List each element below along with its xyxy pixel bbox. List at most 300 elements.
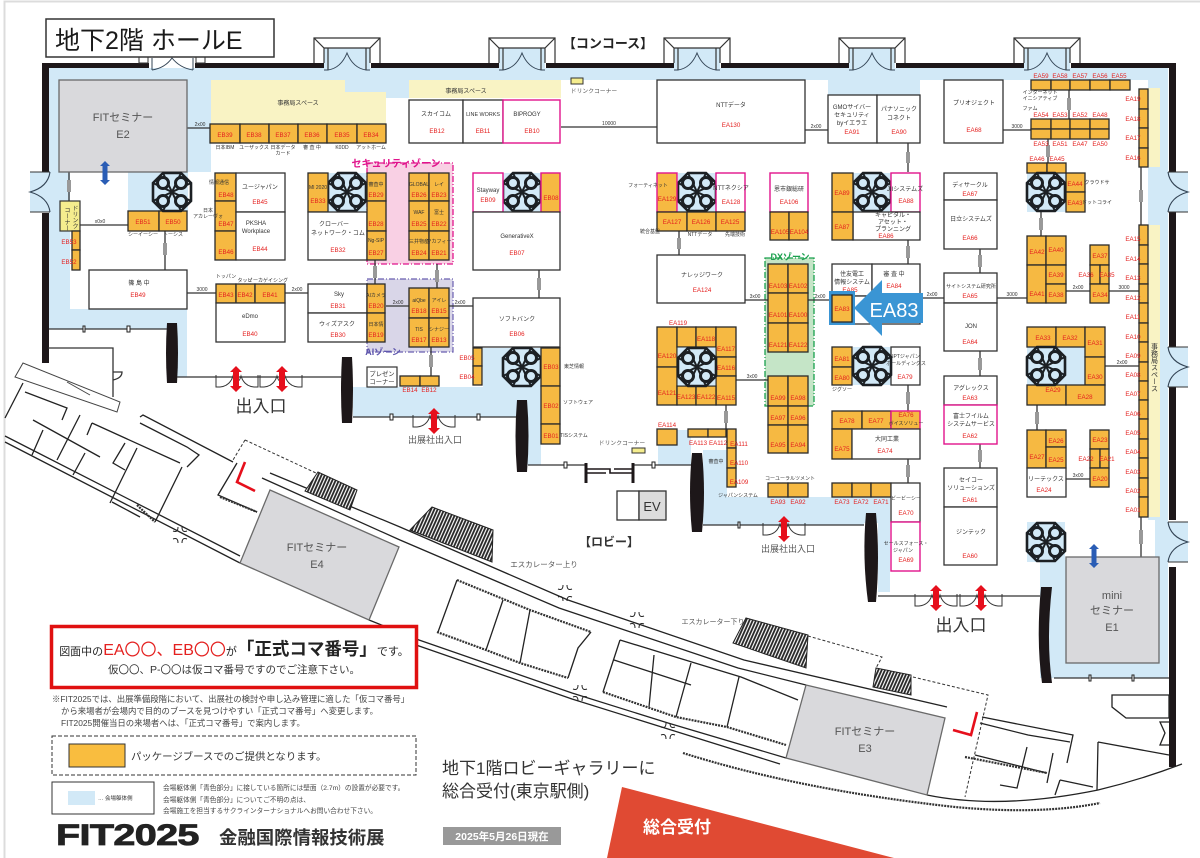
booth: EA106: EA104: [790, 229, 809, 236]
presentation corner: プレゼン: [369, 369, 395, 378]
booths: middle column EA68-EA60: ディサークル: [952, 181, 988, 189]
booths: EA37-EA34: EA34: [1092, 292, 1108, 299]
gap dimension labels: [95, 121, 1130, 479]
booths: EA46-EA43: EA44: [1067, 181, 1083, 188]
booths: EB09-EB06: [473, 173, 560, 347]
DX zone booths: EA101: [769, 312, 788, 319]
booths: EA114-EA109: EA110: [730, 460, 749, 467]
booths: top row EB39-EB34: EB38: [246, 132, 262, 139]
booth EB49: EB49: [130, 292, 146, 299]
drink corner lobby: [599, 440, 645, 453]
booths: EA114-EA109: EA112: [709, 440, 728, 447]
booths: EA89-EA84: 情報システム: [834, 278, 870, 286]
booths: right column lower: [1125, 225, 1158, 517]
booths: EB53-EB50: EB53: [61, 239, 77, 246]
reception note: 地下1階ロビーギャラリーに: [442, 759, 655, 778]
seminar room E2: [59, 80, 187, 172]
exhibitor entrance right: 出展社出入口: [761, 543, 815, 554]
booths: EA46-EA43: EA45: [1049, 156, 1065, 163]
booths: EA23-EA20: EA23: [1092, 437, 1108, 444]
booths: EA89-EA84: EA87: [834, 224, 850, 231]
booths: middle column EA68-EA60: EA68: [966, 127, 982, 134]
gap dimension labels: 3000: [1011, 124, 1023, 130]
drink corner left: ドリンク: [71, 205, 78, 229]
gap dimension labels: 2x00: [292, 287, 303, 293]
booths: EA89-EA84: 審 査 中: [883, 270, 905, 278]
drink corner left: コーナー: [63, 207, 70, 231]
gap dimension labels: 2x00: [1073, 285, 1084, 291]
gap dimension labels: 2x00: [811, 124, 822, 130]
booths: EA73-EA69: EA72: [853, 499, 869, 506]
booths: EA78-EA74: EA77: [868, 418, 884, 425]
booths: EA78-EA74: EA76: [898, 412, 914, 419]
booths: EA27-EA24: リーテックス: [1028, 476, 1064, 483]
booths: EB09-EB06: EB08: [543, 195, 559, 202]
booths: EB33-EB27: 審査中: [368, 181, 384, 188]
seminar room E2: E2: [116, 129, 130, 141]
booth EB49: 篠 島 中: [128, 279, 150, 287]
escalators: エスカレーター下り: [682, 617, 744, 626]
seminar room E1: セミナー: [1090, 604, 1134, 617]
booths: EA59-EA47 block: EA50: [1092, 141, 1108, 148]
booths: EB48-EB44: EB47: [218, 221, 234, 228]
booths: EA123-EA115 cluster: EA116: [717, 365, 736, 372]
reception triangle: 総合受付: [643, 818, 711, 837]
booths: EA59-EA47 block: EA48: [1092, 112, 1108, 119]
booths: middle column EA68-EA60: EA60: [962, 553, 978, 560]
booth: EA106: EA106: [780, 199, 799, 206]
booths: Sky and wizask: EB30: [330, 332, 346, 339]
icon: pillar cluster EB: [328, 173, 366, 211]
booths: middle column EA68-EA60: プリオジェクト: [953, 100, 995, 107]
drink corner left: [60, 201, 80, 231]
booths: middle column EA68-EA60: セイコー: [959, 477, 983, 484]
zone: security: [352, 158, 453, 264]
booths: right column lower: EA01: [1125, 507, 1141, 514]
booths: right column upper: EA17: [1125, 135, 1141, 142]
booths: security zone: WAF: [414, 210, 424, 216]
booths: EA91 EA90: EA90: [891, 129, 907, 136]
booths: EB48-EB44: アカレーヴォ: [193, 213, 223, 220]
booths: EA42-EA38: [1027, 236, 1066, 303]
booths: middle column EA68-EA60: 富士フイルム: [953, 412, 989, 420]
top booths: EB12 EB11 EB10: EB12: [429, 128, 445, 135]
booths: right column lower: EA14: [1125, 256, 1141, 263]
booths: right column lower: EA12: [1125, 295, 1141, 302]
booths: EA81-EA79: EA80: [834, 375, 850, 382]
booths: EA73-EA69: EA73: [834, 499, 850, 506]
booths: EA27-EA24: EA24: [1036, 487, 1052, 494]
booths: AI zone: アイレ: [432, 298, 446, 304]
entrance right: [915, 585, 1002, 635]
callout arrow EA83: [854, 280, 923, 336]
lobby door structure: [586, 463, 633, 483]
booths: EA46-EA43: [1027, 156, 1112, 212]
booths: EA81-EA79: ホールディングス: [886, 360, 926, 367]
booths: EA129-EA124: EA127: [663, 219, 682, 226]
top booths: EB12 EB11 EB10: LINE WORKS: [466, 112, 500, 118]
booths: EA123-EA115 cluster: EA118: [697, 336, 716, 343]
booths: EA27-EA24: EA26: [1048, 438, 1064, 445]
notice box: 仮〇〇、P-〇〇は仮コマ番号ですのでご注意下さい。: [108, 663, 360, 676]
booth EA130: EA130: [722, 122, 741, 129]
gap dimension labels: 3x00: [1073, 473, 1084, 479]
large pillars: [166, 323, 1052, 683]
booths: EA89-EA84: 住友電工: [840, 270, 864, 278]
gap dimension labels: 2x00: [927, 292, 938, 298]
booths: right column lower: EA11: [1126, 314, 1141, 321]
reception note: 総合受付(東京駅側): [442, 782, 589, 801]
booths: EA129-EA124: [628, 173, 749, 303]
booths: EB43-EB40: EB43: [218, 292, 234, 299]
booths: AI zone: シナジー: [429, 327, 449, 333]
booths: EA123-EA115 cluster: [657, 320, 736, 405]
reception triangle: [607, 787, 894, 858]
booths: top row EB39-EB34: 日本IBM: [216, 144, 234, 151]
gap dimension labels: 3000: [1118, 285, 1130, 291]
booths: right column upper: EA18: [1125, 116, 1141, 123]
booths: security zone: EB23: [431, 192, 447, 199]
top booths: EB12 EB11 EB10: EB11: [476, 128, 491, 135]
top booths: EB12 EB11 EB10: EB10: [524, 128, 540, 135]
icon: pillar cluster EA29: [1027, 347, 1065, 385]
booths: EA23-EA20: [1078, 430, 1115, 487]
entrance left: [216, 366, 302, 416]
icon: pillar lower right: [1027, 523, 1065, 561]
booths: EB33-EB27: EB32: [330, 247, 346, 254]
gap dimension labels: 3000: [196, 287, 208, 293]
zone: DX: [765, 252, 814, 406]
booths: right column lower: EA07: [1125, 391, 1141, 398]
DX zone booths: [768, 264, 808, 406]
red direction marks: [237, 462, 977, 735]
booths: EA91 EA90: byイエラエ: [837, 120, 867, 127]
booths: EB33-EB27: ネットワーク・コム: [311, 230, 365, 237]
booths: EB48-EB44: [193, 173, 285, 260]
booths: EA37-EA34: EA35: [1099, 272, 1115, 279]
booths: security zone: EB26: [411, 192, 427, 199]
booths: EA59-EA47 block: EA58: [1052, 73, 1068, 80]
top doors: [139, 38, 1080, 70]
booths: right column lower: EA10: [1125, 334, 1141, 341]
booths: EA129-EA124: EA124: [693, 287, 712, 294]
icon: pillar cluster EB09: [503, 173, 541, 211]
icon: pillar cluster EA43: [1027, 173, 1065, 211]
booths: EA78-EA74: 大同工業: [875, 435, 899, 443]
booths: EA89-EA84: JIIシステムズ: [887, 185, 923, 193]
presentation corner: コーナー: [369, 378, 395, 386]
booths: AI zone: [366, 284, 449, 347]
booths: middle column EA68-EA60: 日立システムズ: [950, 215, 992, 223]
legend note: [163, 783, 404, 815]
booths: EA114-EA109: EA109: [730, 479, 749, 486]
booths: EA114-EA109: [657, 422, 758, 499]
top booths: EB12 EB11 EB10: 事務局スペース: [445, 87, 487, 95]
booths: top row EB39-EB34: アットホーム: [356, 145, 386, 151]
booths: security zone: 三井物産: [409, 238, 429, 245]
booths: EB09-EB06: Stayway: [477, 188, 499, 194]
booths: middle column EA68-EA60: [944, 80, 1003, 565]
gap dimension labels: 2x00: [815, 294, 826, 300]
booths: security zone: EB25: [411, 221, 427, 228]
booths: EB09-EB06: GenerativeX: [500, 234, 534, 240]
booths: EB33-EB27: クローバー: [319, 221, 349, 228]
booths: Sky and wizask: [308, 284, 367, 342]
booths: EB33-EB27: [308, 173, 386, 260]
booths: AI zone: EB19: [368, 332, 384, 339]
booths: EA78-EA74: EA75: [834, 446, 850, 453]
exhibitor entrance left: 出展社出入口: [408, 434, 462, 445]
booth: EA106: 恩市銀総研: [774, 185, 804, 193]
booths: security zone: EB21: [431, 250, 447, 257]
booths: EB53-EB50: EB52: [61, 259, 77, 266]
booths: EA73-EA69: ジャパン: [893, 548, 913, 554]
lobby label: 【ロビー】: [579, 534, 639, 549]
booths: EA46-EA43: ドットコライ: [1082, 200, 1112, 206]
logo subtitle: 金融国際情報技術展: [219, 827, 385, 848]
gap dimension labels: 3x00: [750, 294, 761, 300]
escalators: エスカレーター上り: [510, 560, 578, 569]
DX zone booths: EA98: [790, 395, 806, 402]
seminar room E4: E4: [310, 559, 324, 571]
booths: EA91 EA90: EA91: [844, 129, 860, 136]
booths: EA59-EA47 block: EA53: [1033, 141, 1049, 148]
elevator: [617, 491, 666, 520]
booths: security zone: マカフィー: [427, 239, 451, 245]
booths: EA78-EA74: [832, 411, 923, 459]
presentation corner: [367, 367, 397, 387]
booths: AI zone: AIカメラ: [366, 293, 386, 299]
booths: EA129-EA124: EA125: [721, 219, 740, 226]
booths: EB48-EB44: PKSHA: [246, 221, 266, 227]
highlighted booth EA83: EA83: [834, 306, 850, 313]
booths: middle column EA68-EA60: ソリューションズ: [947, 484, 995, 492]
booths: middle column EA68-EA60: EA67: [962, 191, 978, 198]
booths: EB43-EB40: タッピ: [237, 277, 253, 284]
booths: EB43-EB40: EB40: [242, 331, 258, 338]
booths: below DX zone: [765, 406, 815, 506]
booths: EA73-EA69: ビービーシー: [891, 495, 921, 502]
note text: から来場者が会場内で目的のブースを見つけやすい「正式コマ番号」へ変更します。: [61, 706, 378, 716]
booths: right column lower: 事務局スペース: [1150, 342, 1158, 392]
booths: middle column EA68-EA60: EA62: [962, 433, 978, 440]
entrance left: 出入口: [236, 397, 286, 416]
booths: EA46-EA43: EA43: [1067, 200, 1083, 207]
booths: EA33-EA28: [1027, 327, 1105, 405]
booths: EA59-EA47 block: イニシアティブ: [1023, 95, 1057, 102]
booths: top row EB39-EB34: ユーザックス: [239, 145, 269, 151]
date stamp: 2025年5月26日現在: [455, 830, 549, 843]
booths: AI zone: EB20: [368, 303, 384, 310]
booths: middle column EA68-EA60: EA61: [962, 497, 978, 504]
booths: middle column EA68-EA60: JON: [965, 324, 977, 330]
booths: EA33-EA28: EA33: [1035, 335, 1051, 342]
booths: EA123-EA115 cluster: EA120: [658, 353, 677, 360]
booths: EA73-EA69: [832, 483, 928, 571]
booths: EA91 EA90: コネクト: [887, 115, 911, 122]
booths: EB48-EB44: Workplace: [242, 229, 271, 235]
booths: EA129-EA124: EA126: [692, 219, 711, 226]
booths: EB48-EB44: EB45: [252, 199, 268, 206]
booths: below DX zone: EA94: [790, 442, 806, 449]
booths: EA42-EA38: EA42: [1029, 249, 1045, 256]
booths: EA114-EA109: 審査中: [708, 458, 724, 465]
booths: top row EB39-EB34: EB37: [275, 132, 291, 139]
legend: package booth: [52, 736, 416, 775]
highlighted booth EA83: [829, 291, 855, 325]
top booths: EB12 EB11 EB10: BIPROGY: [513, 112, 541, 118]
booths: EA123-EA115 cluster: EA117: [717, 346, 736, 353]
booths: EA91 EA90: セキュリティ: [834, 112, 870, 119]
booths: EA59-EA47 block: EA59: [1033, 73, 1049, 80]
booths: EA59-EA47 block: EA55: [1111, 73, 1127, 80]
booth: EA106: [770, 173, 809, 240]
booths: EB53-EB50: トーシス: [163, 232, 183, 238]
booths: top row EB39-EB34: EB35: [334, 132, 350, 139]
note text: [52, 694, 409, 728]
booths: right column upper: EA19: [1125, 96, 1141, 103]
booths: EB43-EB40: トッパン: [216, 274, 236, 280]
booths: EB33-EB27: Ng-SIP: [368, 238, 385, 244]
DX zone booths: EA121: [769, 342, 788, 349]
booths: EB53-EB50: EB51: [135, 219, 151, 226]
booths: right column upper: EA16: [1125, 155, 1141, 162]
booths: EA33-EA28: EA31: [1087, 340, 1103, 347]
booths: EA23-EA20: EA22: [1078, 456, 1094, 463]
booths: EB33-EB27: EB29: [368, 192, 384, 199]
booths: top row EB39-EB34: 事務局スペース: [277, 99, 319, 107]
seminar room E1: [1066, 557, 1159, 663]
booths: EA59-EA47 block: [1022, 73, 1130, 148]
DX zone booths: EA103: [769, 283, 788, 290]
booths: EA33-EA28: EA29: [1045, 387, 1061, 394]
booths: EA89-EA84: EA89: [834, 190, 850, 197]
booths: EA129-EA124: EA128: [722, 199, 741, 206]
booths: EB43-EB40: EB42: [237, 292, 253, 299]
DX zone booths: EA102: [789, 283, 808, 290]
booths: EA129-EA124: ナレッジワーク: [681, 272, 723, 279]
booths: EB05-EB01: EB01: [543, 433, 559, 440]
seminar room E2: FITセミナー: [93, 111, 153, 124]
exhibitor entrance right: [761, 516, 815, 554]
booths: EA59-EA47 block: EA52: [1072, 112, 1088, 119]
booths: EB53-EB50: [61, 211, 187, 270]
booths: AI zone: TIS: [415, 327, 424, 333]
booths: EB05-EB01: ソフトウェア: [563, 399, 593, 406]
booths: EB05-EB01: [459, 348, 593, 444]
icon: pillar cluster EA88: [853, 173, 891, 211]
yellow office spaces: [211, 80, 1160, 517]
legend note: 会場躯体側「青色部分」についてご不明の点は、: [163, 795, 310, 804]
booths: Sky and wizask: EB31: [330, 303, 346, 310]
booths: EA89-EA84: EA86: [878, 233, 894, 240]
booths: EA89-EA84: EA84: [886, 283, 902, 290]
booths: middle column EA68-EA60: EA65: [962, 293, 978, 300]
booths: EB14 EB12: EB14: [402, 387, 418, 394]
seminar room E4: FITセミナー: [287, 541, 347, 554]
drink corner lobby: ドリンクコーナー: [599, 440, 645, 447]
booths: right column lower: EA02: [1125, 488, 1141, 495]
escalators: [233, 440, 988, 797]
booths: EA114-EA109: EA113: [689, 440, 708, 447]
booth EB49: [89, 270, 187, 309]
booths: EA37-EA34: EA37: [1092, 253, 1108, 260]
booths: top row EB39-EB34: 審 査 中: [303, 144, 321, 151]
booths: below DX zone: EA97: [770, 415, 786, 422]
booths: EB48-EB44: ユージャパン: [242, 184, 278, 191]
booths: EB09-EB06: EB06: [509, 331, 525, 338]
booths: EA91 EA90: [828, 95, 920, 143]
booths: EA59-EA47 block: EA51: [1052, 141, 1068, 148]
booths: EB43-EB40: eDmo: [242, 314, 259, 320]
booths: AI zone: 日本情: [368, 321, 384, 328]
booths: below DX zone: EA92: [790, 499, 806, 506]
booths: EA89-EA84: プランニング: [875, 225, 911, 233]
seminar room E3: E3: [858, 743, 872, 755]
booths: EA114-EA109: EA114: [658, 422, 677, 429]
booths: EA89-EA84: [832, 173, 923, 324]
booths: middle column EA68-EA60: EA66: [962, 235, 978, 242]
booths: EB05-EB01: EB05: [459, 355, 475, 362]
callout arrow EA83: EA83: [870, 300, 918, 322]
title: 地下2階 ホールE: [55, 27, 243, 55]
notice box: [52, 626, 416, 688]
booths: EA89-EA84: EA85: [842, 287, 858, 294]
booths: EA37-EA34: EA36: [1078, 272, 1094, 279]
booths: EB43-EB40: [216, 274, 288, 342]
drink corner top: ドリンクコーナー: [571, 88, 617, 95]
booths: EA27-EA24: EA27: [1029, 454, 1045, 461]
booths: EB09-EB06: ソフトバンク: [499, 316, 535, 323]
booths: middle column EA68-EA60: EA64: [962, 339, 978, 346]
reception note: [442, 759, 655, 801]
booths: EA81-EA79: EA81: [834, 356, 850, 363]
booths: EB05-EB01: EB03: [543, 364, 559, 371]
booths: EA81-EA79: EA79: [897, 374, 913, 381]
booths: below DX zone: EA96: [790, 415, 806, 422]
gap dimension labels: 10000: [602, 121, 616, 127]
gap dimension labels: 2x00: [195, 122, 206, 128]
booths: EA78-EA74: EA78: [839, 418, 855, 425]
booths: middle column EA68-EA60: サイトシステム研究所: [946, 283, 996, 290]
zone: AI: AIゾーン: [365, 347, 401, 357]
booths: security zone: EB24: [411, 250, 427, 257]
booths: EA123-EA115 cluster: EA121: [658, 390, 677, 397]
booths: EA81-EA79: [832, 347, 926, 393]
drink corner top: [571, 78, 617, 95]
booths: EB43-EB40: EB41: [262, 292, 278, 299]
booths: EA46-EA43: クラウドサ: [1084, 179, 1110, 186]
booths: EA123-EA115 cluster: EA123: [677, 394, 696, 401]
partition and connection lines: [48, 90, 1169, 678]
booths: security zone: EB22: [431, 221, 447, 228]
booths: security zone: レイ: [434, 182, 444, 188]
booths: EA129-EA124: NTTネクシア: [713, 185, 749, 192]
booths: EA27-EA24: EA25: [1048, 457, 1064, 464]
seminar room E3: [786, 685, 945, 795]
booths: EA123-EA115 cluster: EA122: [697, 394, 716, 401]
booths: EA89-EA84: キャピタル・: [875, 211, 911, 219]
booths: middle column EA68-EA60: アグレックス: [953, 384, 989, 392]
booths: EB33-EB27: EB33: [310, 198, 326, 205]
side doors: [30, 172, 1188, 562]
booth EA130: [657, 80, 805, 143]
booths: below DX zone: EA95: [770, 442, 786, 449]
zone: security: セキュリティゾーン: [352, 158, 440, 170]
corridor building plan: [5, 363, 1182, 810]
booths: EA23-EA20: EA20: [1092, 476, 1108, 483]
booths: right column lower: EA06: [1125, 411, 1141, 418]
